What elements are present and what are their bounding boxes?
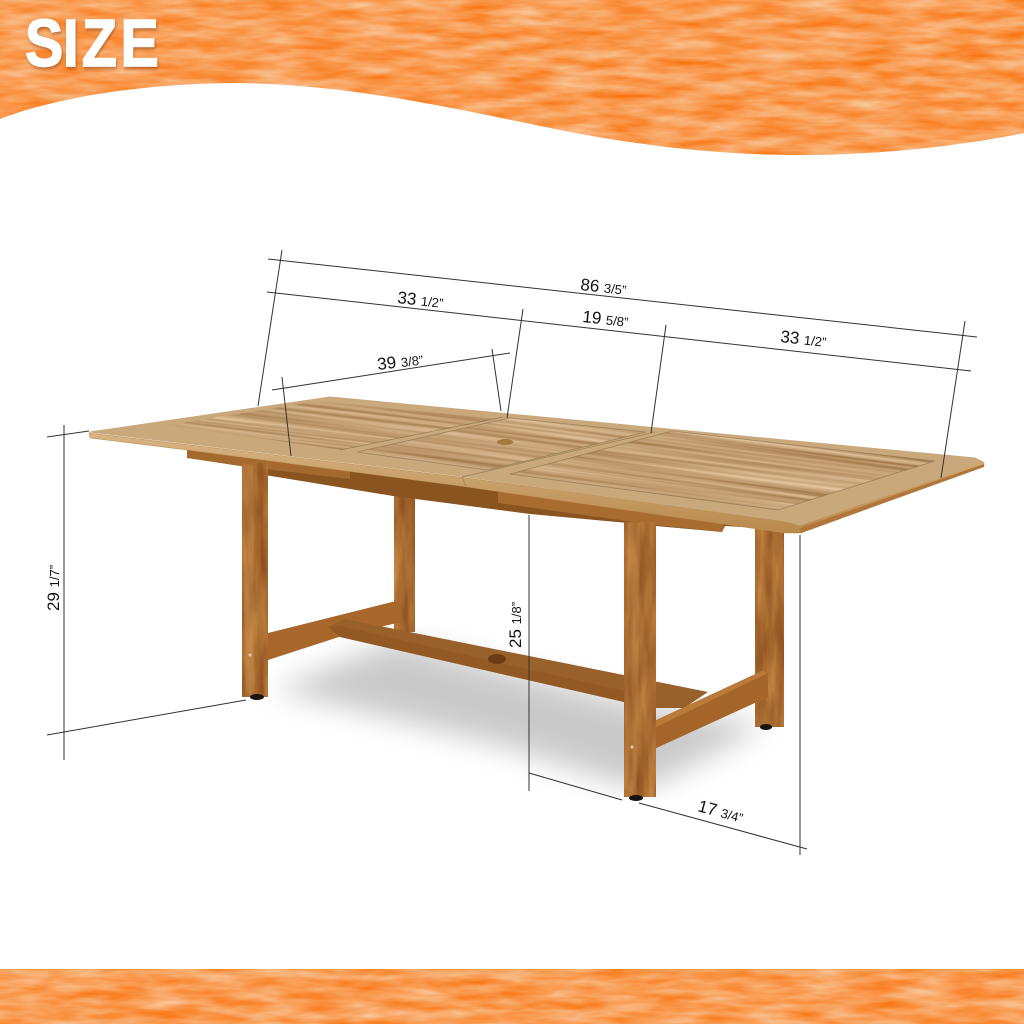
right stretcher <box>652 671 768 750</box>
left stretcher <box>268 601 401 660</box>
label: leg spacing: 17 3/4” <box>696 797 745 827</box>
front right leg <box>624 522 656 801</box>
floor shadow <box>275 640 765 785</box>
label: right leaf length: 33 1/2” <box>780 327 827 351</box>
top orange banner <box>0 0 1024 165</box>
label: centre leaf length: 19 5/8” <box>582 307 629 331</box>
label: left leaf length: 33 1/2” <box>397 288 444 312</box>
table top rim <box>89 433 984 533</box>
apron under table <box>187 449 793 532</box>
table top surface <box>90 397 983 525</box>
back left leg <box>394 492 415 632</box>
panel seams <box>340 417 935 510</box>
middle leaf slats <box>368 418 643 468</box>
label: clearance height: 25 1/8” <box>506 602 525 648</box>
title: SIZE <box>25 6 159 81</box>
dimension lines <box>47 250 977 855</box>
umbrella hole <box>488 654 506 664</box>
label: overall length: 86 3/5” <box>580 275 627 299</box>
umbrella hole plug <box>497 439 513 445</box>
table photo <box>89 348 999 801</box>
left leaf slats <box>170 402 496 450</box>
right leaf slats <box>513 432 934 510</box>
label: table height: 29 1/7” <box>44 565 63 611</box>
back right leg <box>755 528 784 730</box>
bottom orange banner <box>0 969 1024 1024</box>
label: width: 39 3/8” <box>376 350 424 374</box>
centre stretcher <box>328 619 708 708</box>
front left leg <box>242 463 268 700</box>
